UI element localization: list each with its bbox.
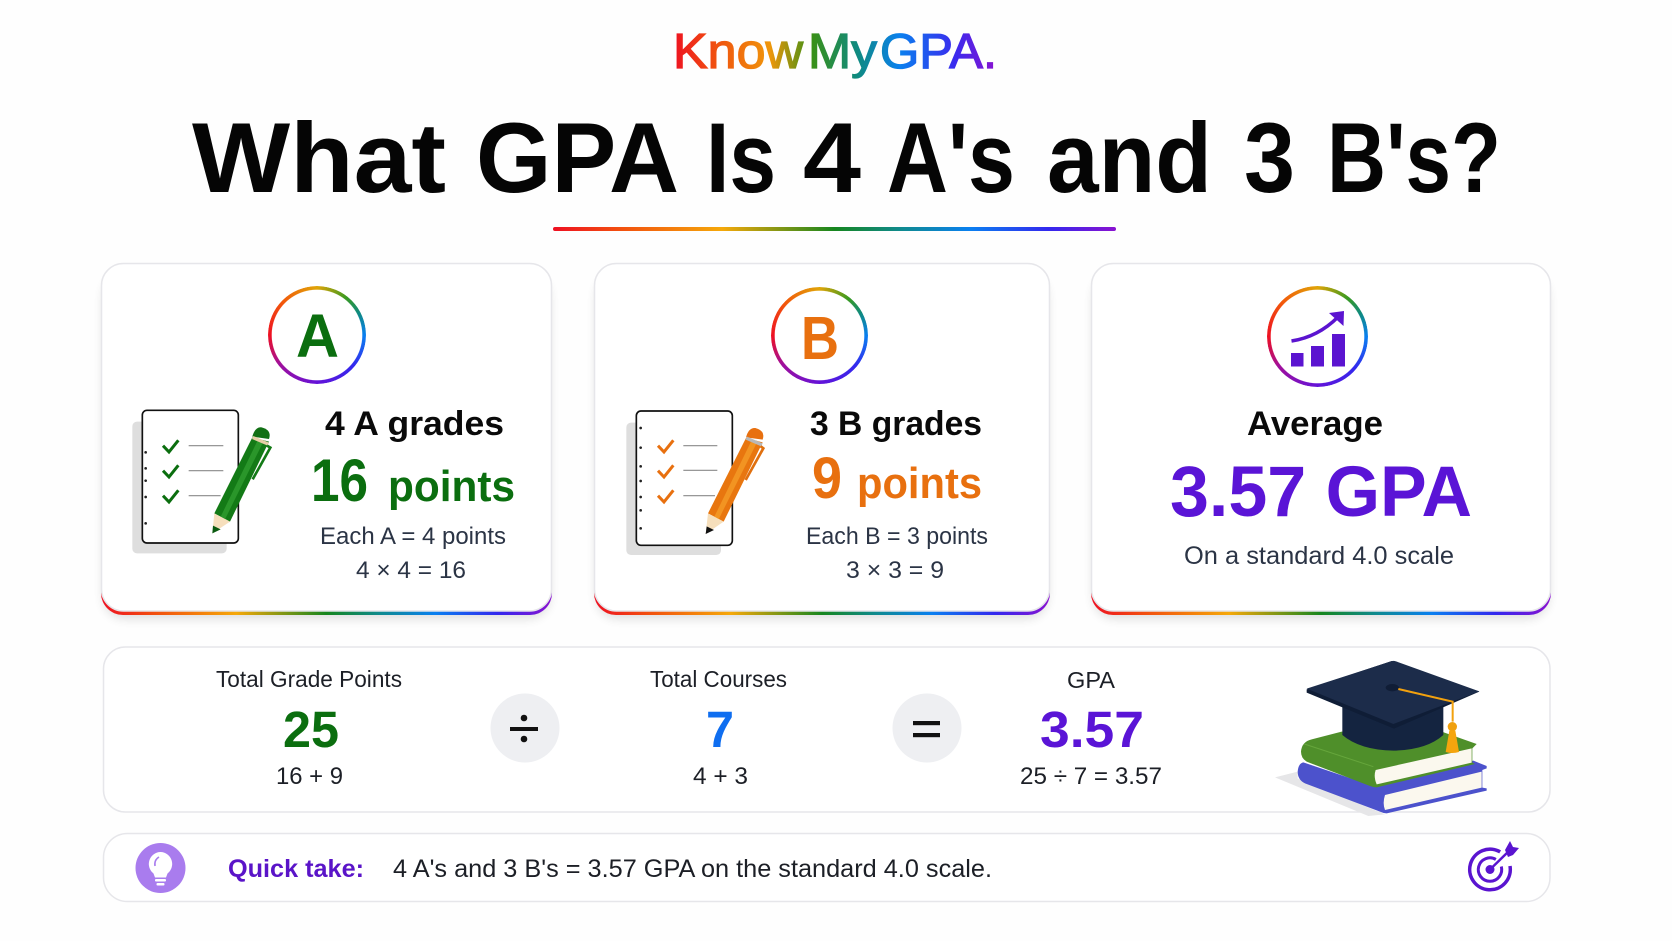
icon: graduation cap on books [1275,661,1487,816]
GPA column [1020,667,1162,790]
text: quick take label: Quick take: [228,855,364,883]
icon: lightbulb [136,843,186,893]
text: 4 A grades: 4 A grades [325,405,504,443]
GPA column: 25 ÷ 7 = 3.57 [1020,763,1162,790]
text: each A: Each A = 4 points [320,523,506,550]
text: each B: Each B = 3 points [806,523,988,550]
text: average: Average [1247,405,1383,443]
value: 9 points: 9 [812,446,842,511]
logo: Know [673,25,804,79]
panel: average [1091,263,1551,619]
panel: B grades [594,263,1050,619]
icon: letter B badge [770,287,868,384]
GPA column: GPA [1067,667,1116,693]
text: scale note: On a standard 4.0 scale [1184,542,1454,570]
total grade points column: 25 [283,701,339,758]
total grade points column: 16 + 9 [276,763,343,790]
text: quick take sentence: 4 A's and 3 B's = 3.57 GPA on the standard 4.0 scale. [393,855,992,883]
title: 4 [803,102,861,213]
total courses column: Total Courses [650,666,787,692]
panel: A grades [101,263,552,619]
title underline [553,227,1116,231]
icon: letter B badge: B [801,304,839,372]
value: 16 points [311,447,515,514]
GPA column: 3.57 [1040,701,1144,758]
value: 9 points: points [857,459,982,508]
title: and [1047,102,1212,213]
text: A calculation: 4 × 4 = 16 [356,557,466,584]
icon: rising bar chart badge [1266,286,1368,386]
value: 9 points [812,446,982,511]
title: GPA [476,102,679,213]
total courses column [650,666,787,790]
icon: equals symbol [892,694,962,762]
value: 16 points: points [388,462,515,511]
icon: checklist with green pencil [132,410,270,553]
icon: letter A badge [268,286,366,384]
title: B's? [1327,102,1501,213]
text: 3 B grades: 3 B grades [810,405,982,443]
total grade points column: Total Grade Points [216,666,402,692]
icon: divide symbol [490,694,560,762]
value: 16 points: 16 [311,447,368,514]
logo: My [808,25,878,79]
value: 3.57 GPA: 3.57 GPA [1170,453,1472,532]
total courses column: 7 [706,701,734,758]
icon: checklist with orange pencil [626,411,763,555]
total grade points column [216,666,402,790]
panel: quick take [104,834,1550,902]
logo [673,25,997,79]
title [192,102,1501,213]
title: 3 [1244,102,1295,213]
icon: target with arrow [1470,841,1519,890]
total courses column: 4 + 3 [693,763,748,790]
title: What [192,102,446,213]
title: Is [706,102,776,213]
icon: letter A badge: A [296,302,339,370]
text: B calculation: 3 × 3 = 9 [846,557,944,584]
logo: GPA. [880,25,997,79]
title: A's [887,102,1015,213]
panel: formula [104,647,1550,816]
